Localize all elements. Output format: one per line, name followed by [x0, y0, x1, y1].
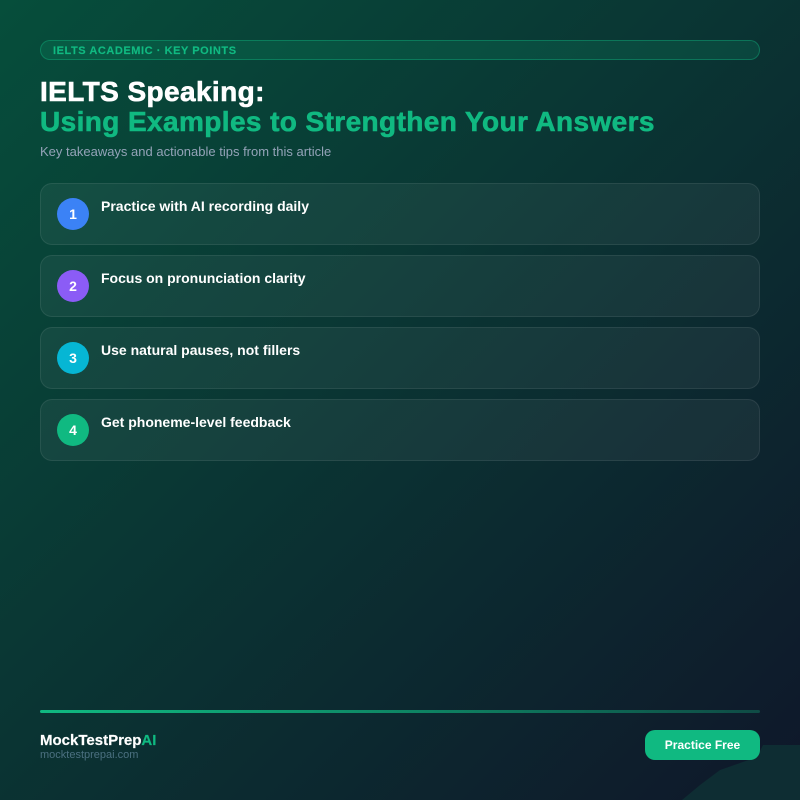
text: tip 4: Get phoneme-level feedback: [101, 414, 291, 430]
badge: number 4: [57, 414, 89, 446]
title: Using Examples to Strengthen Your Answers: [40, 106, 655, 137]
badge: number 2: 2: [69, 278, 77, 294]
badge: category pill: IELTS ACADEMIC · KEY POINTS: [53, 45, 237, 57]
panel: tip 3: [40, 327, 760, 389]
text: tip 3: Use natural pauses, not fillers: [101, 342, 300, 358]
badge: number 3: 3: [69, 350, 77, 366]
text: tip 1: Practice with AI recording daily: [101, 198, 309, 214]
badge: number 2: [57, 270, 89, 302]
text: tip 2: Focus on pronunciation clarity: [101, 270, 306, 286]
badge: number 4: 4: [69, 422, 77, 438]
decorative corner shape: [682, 745, 800, 800]
panel: tip 2: [40, 255, 760, 317]
badge: number 1: [57, 198, 89, 230]
title: IELTS Speaking:: [40, 76, 265, 107]
panel: tip 4: [40, 399, 760, 461]
button: practice free: [645, 730, 760, 760]
brand logo: MockTestPrepAI: [40, 732, 156, 749]
badge: number 3: [57, 342, 89, 374]
footer accent line: [40, 710, 760, 713]
brand url: mocktestprepai.com: [40, 749, 138, 761]
badge: category pill: [40, 40, 760, 60]
badge: number 1: 1: [69, 206, 77, 222]
subtitle: Key takeaways and actionable tips from this article: [40, 144, 331, 159]
button: practice free: Practice Free: [665, 738, 740, 752]
panel: tip 1: [40, 183, 760, 245]
title: [40, 76, 655, 138]
